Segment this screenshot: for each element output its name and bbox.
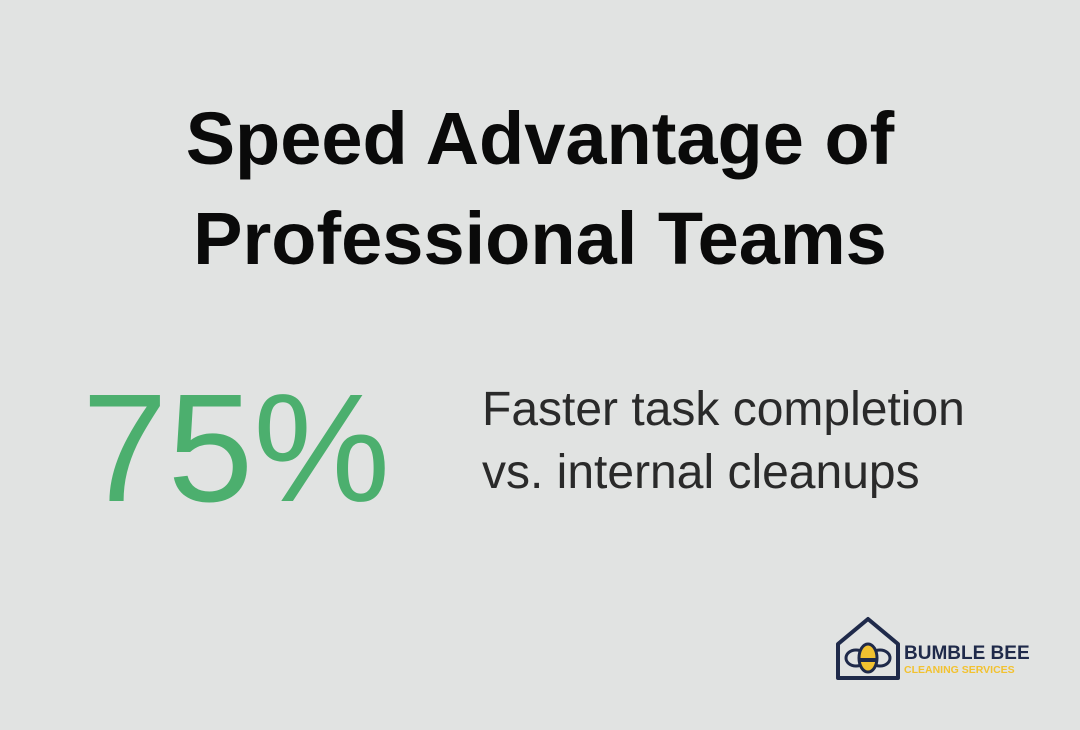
title: Speed Advantage of [186, 97, 894, 180]
stat description [482, 383, 965, 499]
icon: house with bee [836, 616, 900, 680]
logo text: BUMBLE BEE [904, 643, 1030, 664]
stat description: Faster task completion [482, 383, 965, 436]
title [186, 97, 894, 280]
logo [836, 616, 1030, 680]
stat number: 75% [82, 362, 390, 534]
stat description: vs. internal cleanups [482, 446, 920, 499]
logo: CLEANING SERVICES [904, 664, 1015, 676]
title: Professional Teams [193, 197, 887, 280]
